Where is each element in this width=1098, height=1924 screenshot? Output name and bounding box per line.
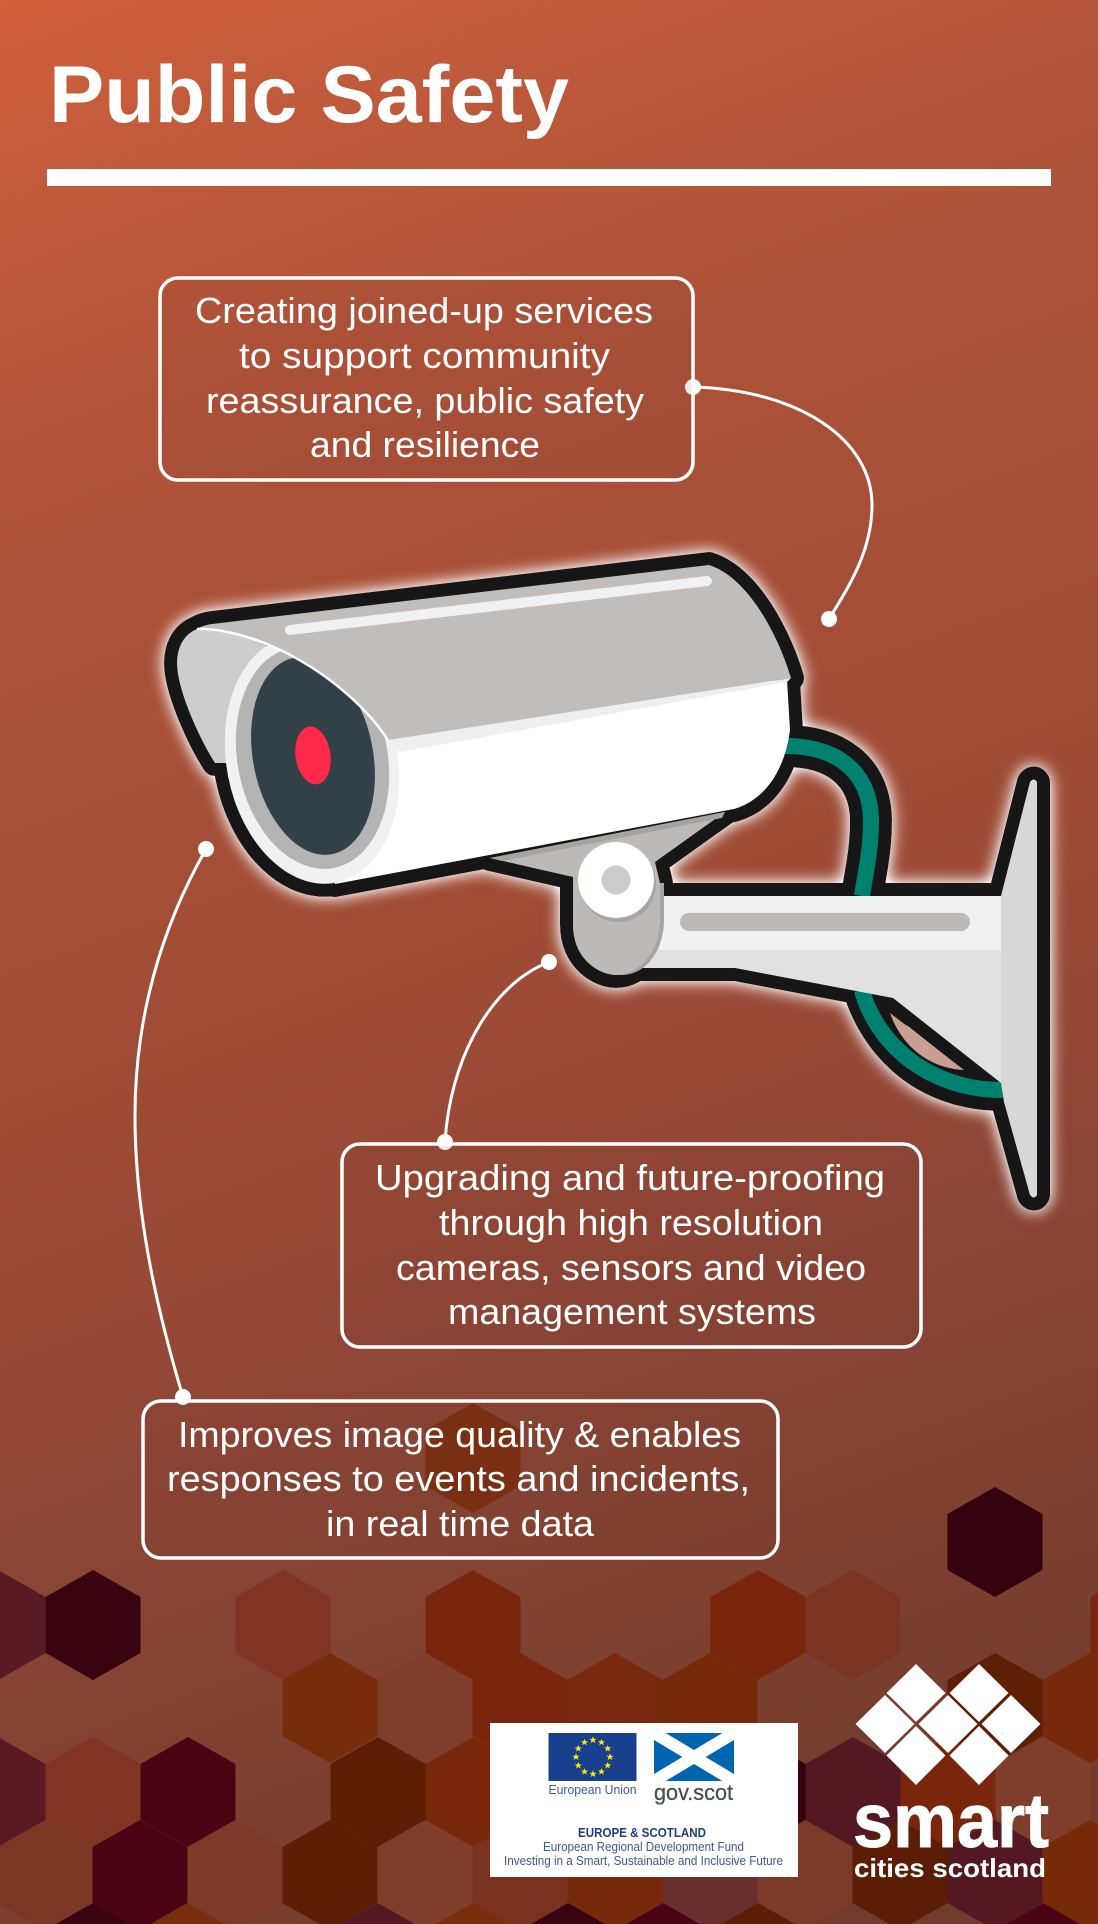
- pivot housing: [573, 883, 664, 975]
- connector: upgrading to camera mount: [437, 954, 557, 1150]
- icon: EU flag: [548, 1733, 636, 1781]
- lens dark glass: [235, 646, 391, 866]
- cable upper: [785, 746, 871, 896]
- wall plate: [1001, 780, 1037, 1198]
- funding logos panel: [490, 1723, 798, 1877]
- funding tagline: Investing in a Smart, Sustainable and Inclusive Future: [504, 1854, 783, 1868]
- title: Public Safety: [49, 50, 569, 140]
- callout: image quality: responses to events and incidents,: [167, 1458, 750, 1499]
- logo wordmark smart: smart: [853, 1779, 1049, 1864]
- connector: image quality to camera: [135, 841, 214, 1405]
- pivot knob: [578, 842, 656, 922]
- arm: [642, 896, 1001, 1083]
- hood lower highlight: [388, 678, 791, 752]
- lens outer ring: [204, 621, 420, 899]
- callout: upgrading: Upgrading and future-proofing: [375, 1157, 885, 1198]
- callout: joined-up services: and resilience: [310, 424, 540, 465]
- cable lower: [860, 975, 1003, 1090]
- smart cities scotland logo: [853, 1664, 1049, 1883]
- gap between cable and arm: [890, 1013, 964, 1070]
- icon: Scottish saltire: [654, 1733, 734, 1781]
- hood highlight: [290, 581, 707, 630]
- callout: image quality: in real time data: [326, 1503, 595, 1544]
- callout: joined-up services: [160, 278, 693, 480]
- security camera illustration: [177, 565, 1037, 1198]
- callout: upgrading: cameras, sensors and video: [396, 1247, 866, 1288]
- red indicator: [292, 724, 334, 787]
- icon: diamond lattice: [856, 1664, 1040, 1785]
- hood edge line: [197, 629, 388, 740]
- hexagon pattern: [0, 1403, 1098, 1924]
- lens grey ring: [218, 634, 407, 882]
- callout: joined-up services: reassurance, public safety: [206, 380, 644, 421]
- title rule: [47, 169, 1051, 186]
- cable teal upper: [785, 746, 871, 896]
- callout: upgrading: management systems: [448, 1291, 816, 1332]
- callout: image quality: [143, 1401, 778, 1558]
- connector: joined-up services to camera: [685, 379, 872, 627]
- visor side: [177, 629, 300, 763]
- funding line: European Regional Development Fund: [543, 1840, 744, 1854]
- callout: upgrading: [342, 1144, 921, 1347]
- camera hood: [197, 565, 791, 740]
- callout: joined-up services: to support community: [239, 335, 610, 376]
- callout: joined-up services: Creating joined-up services: [195, 290, 653, 331]
- cable teal lower: [862, 990, 1003, 1090]
- funding heading: EUROPE & SCOTLAND: [578, 1826, 706, 1840]
- camera mount bracket: [490, 812, 725, 883]
- EU label: European Union: [548, 1783, 637, 1797]
- outlines: [177, 565, 1037, 1198]
- gov.scot label: gov.scot: [654, 1780, 733, 1805]
- callout: upgrading: through high resolution: [439, 1202, 823, 1243]
- camera body: [320, 680, 790, 884]
- logo wordmark cities scotland: cities scotland: [854, 1853, 1046, 1883]
- callout: image quality: Improves image quality & enables: [178, 1414, 741, 1455]
